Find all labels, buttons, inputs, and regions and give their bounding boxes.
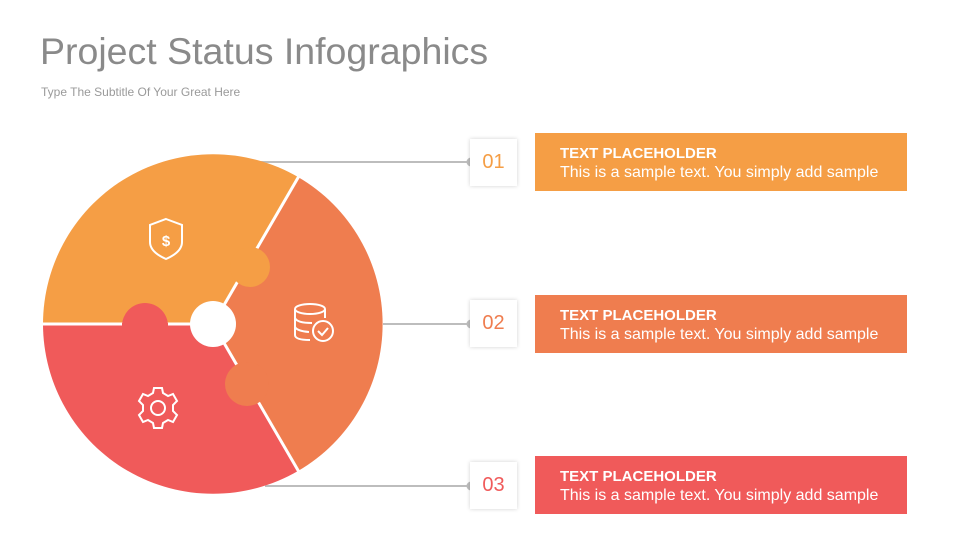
icon: gear — [139, 388, 177, 428]
item 02 number: 02 — [482, 312, 505, 334]
icon: shield dollar: $ — [162, 233, 171, 250]
segment: red — [43, 324, 298, 494]
icon: database check — [295, 304, 333, 341]
subtitle: Type The Subtitle Of Your Great Here — [41, 85, 240, 99]
item 01 number: 01 — [482, 151, 505, 173]
item 02 bar: TEXT PLACEHOLDER — [560, 307, 717, 324]
item 01 bar — [535, 133, 907, 191]
item 02 bar: This is a sample text. You simply add sample — [560, 326, 878, 343]
item 03 number: 03 — [482, 474, 505, 496]
item 03 bar: This is a sample text. You simply add sample — [560, 487, 878, 504]
item 01 bar: This is a sample text. You simply add sample — [560, 164, 878, 181]
icon: shield dollar — [150, 219, 182, 259]
item 02 number — [470, 300, 517, 347]
item 03 bar: TEXT PLACEHOLDER — [560, 468, 717, 485]
segment: orange — [43, 154, 298, 324]
item 03 bar — [535, 456, 907, 514]
center circle — [190, 301, 236, 347]
item 03 number — [470, 462, 517, 509]
title: Project Status Infographics — [40, 30, 488, 72]
segment: coral — [213, 177, 383, 471]
item 02 bar — [535, 295, 907, 353]
item 01 bar: TEXT PLACEHOLDER — [560, 145, 717, 162]
connector lines — [255, 158, 474, 490]
item 01 number — [470, 139, 517, 186]
tabs — [122, 247, 270, 406]
